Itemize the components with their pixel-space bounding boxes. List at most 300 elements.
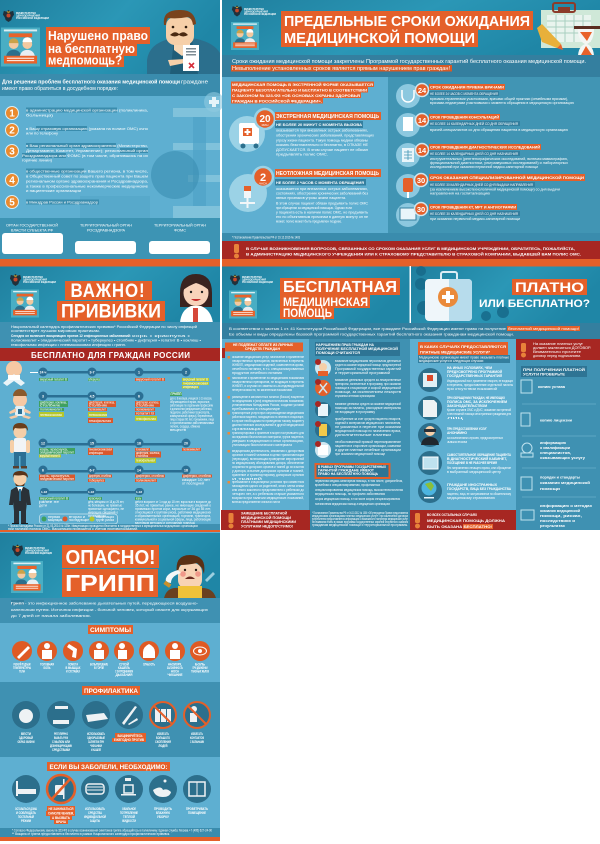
number 3 item: горячие линии) [22,158,53,162]
title: МЕДИЦИНСКАЯ [283,297,368,309]
column: не подлежат оплате: ЖНВЛП, медицинских изделий, компонентов крови, [232,363,304,367]
symptom: заложенность: ЗАЛОЖЕННОСТЬ [167,666,183,670]
timeline row 5: имеющие сведений о [88,510,118,514]
action: не заниматься самолечением: ВРАЧА [56,820,66,824]
column: не подлежат оплате: по медицинскому обследованию донора, обеспечение [232,461,304,465]
timer 20 [255,109,275,129]
prevention: салфетки [82,701,110,752]
column: не подлежат оплате: установленным Минздравом России, создание условий [232,403,304,407]
timeline row 1: 2 [185,370,187,374]
column: не подлежат оплате: (пересадки), включающая проведение мероприятий [232,457,304,461]
column: не подлежат оплате: сохранности донорских органов и тканей до их изъятия [232,465,304,469]
timeline row 3: эпидемический паротит [40,450,74,454]
column: не подлежат оплате: умерших в медицинских и иных организациях, [232,439,304,443]
section: профилактика [0,682,220,757]
title: БЕСПЛАТНАЯ [283,279,397,296]
symptom: боль в глазах [190,641,210,674]
panel: Бесплатная медицинская помощь [221,265,600,530]
intro band: Сегодня он включает вакцинацию против 12 инфекционных заболеваний: [11,333,131,338]
action: влажная уборка [149,775,177,819]
column: не подлежат оплате [222,339,309,510]
timeline row 2: столбняк [89,404,108,408]
contact boxes: ТЕРРИТОРИАЛЬНЫЙ ОРГАН [154,222,206,228]
flu note: лица старше 60 лет, призывники, лица [170,418,214,422]
timeline row 3: полиомиелит [183,448,200,452]
timer 2: ЧАСА [259,182,267,186]
text: неотложная: В этом случае пациент обязан предъявить полис ОМС [276,200,368,206]
column: не подлежат оплате: ЖНВЛП, в случаях их замены из-за индивидуальной [232,384,304,388]
checklist item: порядки: оказания медицинской [540,480,591,485]
legal note: * Постановление Правительства РФ от 04.10.2012 № 1006 «Об утверждении Правил предоставления [312,511,408,515]
case: globe [418,479,511,503]
symptom: боль в глазах: БОЛЬ [195,662,206,666]
symptom: кашель: СУХОЙ [119,662,129,666]
outlined note [315,464,390,478]
item: 14 days diagnostics: НЕ БОЛЕЕ 14 КАЛЕНДАРНЫХ ДНЕЙ СО ДНЯ НАЗНАЧЕНИЯ [430,152,518,156]
text: экстренная [276,128,374,156]
warning: замещение: УСЛУГАМИ НЕДОПУСТИМО! [241,524,293,528]
number 5 item: в Минздрав России и Росздравнадзор [26,200,99,204]
action: маска: ИНДИВИДУАЛЬНОЙ [84,815,106,819]
logo: РОССИЙСКОЙ ФЕДЕРАЦИИ [23,280,56,284]
character: man with document [147,10,220,74]
symptom: температура: РЕЗКИЙ ПОДЪЕМ [14,662,31,666]
logo: ЗДРАВООХРАНЕНИЯ [23,278,47,282]
checklist item: устав: копию устава [538,384,566,389]
case: hospital: ПРЕДУСМОТРЕНО ПРОГРАММОЙ [447,370,503,374]
intro band: граждане [181,80,208,86]
outlined note: В РАМКАХ ПРОГРАММЫ ГОСУДАРСТВЕННЫХ [318,465,387,469]
text: неотложная: явных признаков угрозы жизни пациента. [276,195,346,200]
number 3 item: в Ваш региональный орган здравоохранения (Министерство, [26,143,148,148]
intro band: до 7 дней от начала заболевания. [11,613,91,618]
timeline row 4: каждые 10 лет [182,478,211,482]
timeline row 2: пневмококковая [40,413,62,417]
item: 14 days diagnostics: исследований при оказании первичной медико-санитарной помощи [430,165,538,169]
prevention: мытье рук: РЕГУЛЯРНО [54,732,68,736]
column: не подлежат оплате: возраста при наличии медицинских показаний, [232,496,304,500]
timeline row 5: прививках [88,514,106,518]
timeline row 4: 18 [184,468,188,472]
logo: РОССИЙСКОЙ ФЕДЕРАЦИИ [242,280,273,284]
text: неотложная [276,186,369,224]
checklist heading [521,366,587,377]
item: 24 hours: врачами-терапевтами участковыми, врачами общей практики (семейными врачами), [430,97,568,101]
prevention: избегать контактов [184,702,210,744]
column: не подлежат оплате: по медицинским и (или) эпидемиологическим показаниям, [232,399,304,403]
number 1 item: 1 [9,108,15,120]
number 1 item: в администрацию медицинской организации (поликлиника, [26,108,148,112]
footnote: * Приказ Минздрава России от 21.03.2014 № 125н. Иммунизация проводится бесплатно в государственных и муниципальных медицинских организациях [8,524,198,528]
column: не подлежат оплате: назначение и применение по медицинским показаниям [232,376,305,380]
column: не подлежат оплате: организации [232,427,262,431]
prevention: мытье рук: СРЕДСТВАМИ [52,748,70,752]
logo [10,274,56,286]
intro band: капельным путем. Источник инфекции - больной человек, который опасен для окружающих [11,607,208,612]
column: в каких случаях: В КАКИХ СЛУЧАЯХ ПРЕДОСТАВЛЯЮТСЯ [420,344,506,349]
column: в каких случаях: ПЛАТНЫЕ МЕДИЦИНСКИЕ УСЛУГИ* [420,350,490,354]
icon: ambulance [229,116,265,152]
timer 2: 2 [260,172,266,184]
heading: экстренная: ЭКСТРЕННАЯ МЕДИЦИНСКАЯ ПОМОЩЬ [276,114,379,120]
item: 14 days diagnostics: функциональной диагностики, ультразвуковых исследований) и лабораторных [430,161,568,165]
action: влажная уборка: ПРОВОДИТЬ [154,807,172,811]
case: monitor: САМОСТОЯТЕЛЬНОЕ ОБРАЩЕНИЕ ПАЦИЕНТА [447,453,511,457]
timeline row 3 [38,438,201,463]
intro band: полиомиелит • эпидемический паротит • туберкулез • столбняк • дифтерия • гепатит В • коклюш • [11,338,202,342]
warning: замещение [221,510,310,530]
checklist item: квалификация: оказывающих услугу [540,455,586,460]
checklist item: квалификация [521,440,586,460]
prevention: питание: ЗДОРОВЫЙ [19,736,33,740]
intro band: В соответствии с частью 1 ст. 41 Конституции Российской Федерации, все граждане Российской Федерации имеют право на получение [229,326,507,331]
text: неотложная: оказывается при внезапных острых заболеваниях, [276,186,368,191]
action: постельный режим: РЕЖИМ [21,819,31,823]
logo: МИНИСТЕРСТВО [16,11,36,15]
timeline row 4: от последней [182,482,204,486]
outlined note: ПРАВО НА БЕСПЛАТНУЮ ПОМОЩЬ [318,472,379,476]
case: globe: ГОСУДАРСТВ, ЛИЦА БЕЗ ГРАЖДАНСТВА [447,487,511,491]
checklist item: квалификация: информацию [540,440,567,445]
number 5 item [6,196,99,208]
number 2 item: 2 [9,126,15,136]
warning note: На оказание платных услуг [533,342,584,346]
text: экстренная: оказывается при внезапных острых заболеваниях, [276,128,368,132]
number 4 item [6,168,149,193]
checklist heading: ПРИ ПОЛУЧЕНИИ ПЛАТНОЙ [523,367,585,372]
timeline row 2 [38,392,160,423]
case: anonymous: законом [447,440,468,444]
symptom: головная боль [37,641,57,670]
timeline row 5: привитые однократно, не [88,507,124,511]
contact boxes: РОСЗДРАВНАДЗОРА [87,228,125,232]
logo: МИНИСТЕРСТВО [242,275,262,279]
timeline row 5: и образовательных организаций, торговли, транспорта, [135,514,211,518]
list panel [0,92,224,218]
footnote [0,828,220,837]
title: платно или бесплатно [479,279,590,310]
contact boxes: ТЕРРИТОРИАЛЬНЫЙ ОРГАН [80,222,132,228]
emergency note: С ЗАКОНОМ № 323-ФЗ «ОБ ОСНОВАХ ОХРАНЫ ЗДОРОВЬЯ [232,93,360,98]
logo: ЗДРАВООХРАНЕНИЯ [242,278,266,282]
case: hospital: при отсутствии показаний [447,387,497,391]
intro band [0,598,220,623]
red heading: БЕСПЛАТНО ДЛЯ ГРАЖДАН РОССИИ [31,351,190,360]
prevention: избегать людей: СКОПЛЕНИЯ [155,740,171,744]
timeline row 4: дифтерия, столбняк [136,474,164,478]
title: ГРИПП [65,570,155,596]
case: anonymous: ПРИ ПРЕДОСТАВЛЕНИИ УСЛУГ [447,427,487,431]
intro band: - это инфекционное заболевание дыхательных путей, передающееся воздушно- [25,600,199,606]
title: платно или бесплатно: ПЛАТНО [515,279,584,295]
symptom: заложенность: ЧИХАНИЕ [168,673,183,677]
symptom: температура: ТЕЛА [19,670,25,674]
symptom: горло [89,641,109,670]
symptom: температура [12,641,32,674]
emergency note: ПАЦИЕНТУ БЕЗОТЛАГАТЕЛЬНО И БЕСПЛАТНО В СООТВЕТСТВИИ [232,87,367,92]
logo [12,544,52,556]
violation 5: и другие платные лечебные организации [335,448,401,452]
case: monitor: В ДИАГНОСТИЧЕСКИЙ КАБИНЕТ, [447,457,507,461]
violation 2 [315,378,401,398]
character: teenager [10,423,30,468]
footnote: ** Вакцина от гриппа предоставляется бесплатно в рамках Национального календаря профилактических прививок. [12,832,170,836]
intro band: бесплатной медицинской помощи! [508,326,579,331]
title: платно или бесплатно: ИЛИ БЕСПЛАТНО? [479,298,590,310]
icon: calendar and hourglass [537,3,600,57]
intro band: Грипп [11,600,25,606]
prevention: питание [12,701,40,744]
poster thumbnail [229,290,257,318]
contact boxes: ОРГАН ГОСУДАРСТВЕННОЙ [6,222,58,228]
prevention: салфетки: И КАШЛЕ [91,748,101,752]
warning: во всех остальных случаях: БЫТЬ ОКАЗАНА БЕСПЛАТНО! [427,524,492,529]
column: не подлежат оплате: оказание медицинских услуг, назначение и применение [232,355,304,359]
column: не подлежат оплате: СРЕДСТВ ГРАЖДАН [245,347,281,351]
red heading [0,348,220,361]
prevention: питание: ВЕСТИ [21,732,31,736]
case: documents: ПРИ ОБРАЩЕНИИ ГРАЖДАН, НЕ ИМЕЮЩИХ [447,396,506,400]
poster thumbnail [1,28,40,66]
timeline row 5: ранее не [39,500,59,504]
checklist item: лицензия [521,413,573,426]
symptom: заложенность: НОСА [171,670,179,674]
title [281,11,533,47]
action: маска: СРЕДСТВА [88,811,102,815]
warning: замещение: ПЛАТНЫМИ МЕДИЦИНСКИМИ [241,519,296,524]
warning band [222,241,600,259]
checklist item: лицензия: копию лицензии [540,418,573,422]
timeline row 2: гемофильная [89,419,111,423]
violation 2: отпускаемых аптечными организациями [335,394,375,398]
timeline row 5: прививках против кори, взрослые от 36 до 55 лет, [135,507,211,511]
case: hospital: в перечень, предоставление отдельной палаты [447,383,513,387]
symptom: кашель: С ЗАТРУДНЕНИЕМ [115,670,133,674]
column: нарушением прав [309,339,410,510]
timeline row 3: полиомиелит [136,448,149,452]
footnote [0,524,220,531]
column: не подлежат оплате: лекарственных препаратов, не входящих в перечень [232,380,304,384]
column: не подлежат оплате: хранение и транспортировку донорских органов [232,473,304,477]
timeline row 5: 1-18 [136,490,142,494]
action: маска: ЗАЩИТЫ [90,819,100,823]
item: 14 days [396,113,569,137]
column: не подлежат оплате: пребывания в стационаре [232,407,280,411]
violation 2: помощи, за исключением лекарств [335,390,401,394]
warning: во всех остальных случаях [410,510,516,530]
timeline row 3: инфекция [89,451,103,455]
timer 20: МИН [262,123,268,127]
timeline row 1: 1 [138,370,140,374]
heading: экстренная: НЕ БОЛЕЕ 20 МИНУТ С МОМЕНТА ВЫЗОВА [276,122,362,127]
emergency note [231,82,374,104]
number 3 item: Департамент, Комитет, Управление); региональный орган [26,148,148,153]
emergency note: МЕДИЦИНСКАЯ ПОМОЩЬ В ЭКСТРЕННОЙ ФОРМЕ ОКАЗЫВАЕТСЯ [232,82,373,87]
violation 1: и территориальной программой [335,371,390,375]
action: проветривание [183,775,211,815]
violation 2: препараты, включенные в программу, при оказании [335,382,401,386]
note text: медицинская помощь, по профилю заболевания [315,492,385,496]
checklist item: методы: помощи, рисках, [540,513,582,518]
flu note: коммунальной сферы), беременные, [170,414,213,418]
title: ПРИВИВКИ [61,302,161,322]
timeline row 4: дифтерия, столбняк [183,474,211,478]
violation 4: не указанных в перечне при оказании [335,425,401,429]
symptom: кашель: КАШЕЛЬ [118,666,130,670]
timeline row 1: вирусный гепатит В [183,378,209,382]
timeline row 2: 6 [138,394,140,398]
column: нарушением прав: ПОМОЩИ СЧИТАЮТСЯ [316,351,361,355]
intro band [222,323,600,339]
item: 30 days CT: СРОК ПРОВЕДЕНИЯ КТ, МРТ И АНГИОГРАФИИ [430,205,516,210]
symptom: заложенность [165,641,185,677]
legal note [310,510,410,530]
number 1 item: больница) [26,112,54,118]
prevention: вакцинация: ЕЖЕГОДНО ПРОТИВ [114,738,144,742]
number 2 item [6,124,149,136]
case: documents [418,396,511,420]
symptom: боль в мышцах: В МЫШЦАХ [66,666,81,670]
item: 14 days diagnostics: 14 [418,146,427,155]
title: ОПАСНО! [66,547,156,569]
timeline row 2: гемофильная [136,417,156,421]
column: не подлежат оплате: органов и тканей человека в целях трансплантации [232,453,304,457]
prevention: избегать контактов: ИЗБЕГАТЬ [191,732,203,736]
outlined note: ГАРАНТИЙ ГРАЖДАНЕ ИМЕЮТ [318,468,375,472]
violation 5: пациентов в сторонние организации, компании [335,444,401,448]
checklist item: методы: информацию о методах [540,503,593,508]
column: не подлежат оплате: диагностических исследований в другой медицинской [232,423,304,427]
intro band [222,55,600,77]
case: monitor: в выбранный медицинский центр [447,470,501,474]
timeline row 3: 20 [184,442,188,446]
action: проветривание: ПОМЕЩЕНИЕ [188,811,207,815]
number 4 item: и пациентские организации [26,188,81,193]
text: экстренная: предъявлять полис ОМС. [276,152,328,156]
text: неотложная: при обращении за медицинской помощью. Однако если [276,205,352,210]
item: 24 hours: врачами-педиатрами участковыми с момента обращения в медицинскую организацию [430,101,574,105]
logo: ЗДРАВООХРАНЕНИЯ [25,549,49,553]
checklist item: методы: оказания медицинской [540,508,580,513]
prevention: мытье рук [47,701,75,752]
timer 20: 20 [259,114,271,125]
item: 30 days CT: при оказании первичной медико-санитарной помощи [430,217,520,221]
number 1 item [6,106,148,120]
item: 30 days specialized [396,174,585,198]
title: ВАЖНО! [70,281,146,302]
timeline row 4: корь, краснуха, [40,474,70,478]
logo: МИНИСТЕРСТВО [23,275,43,279]
item: 30 days specialized: направления на госпитализацию [430,192,491,196]
violation 3: взимание денежных средств за оказание медицинской [335,402,401,406]
case: anonymous [418,423,503,447]
item: 30 days CT: 30 [417,205,425,214]
text: экстренная: обострении хронических заболеваний, представляющих [276,132,374,138]
legal note: медицинскими организациями платных медицинских услуг»: при заключении договора [312,514,408,518]
violation 4: приобретение за счет средств пациента лекарств, [335,417,401,421]
symptom: кашель: ДЫХАНИЯ [116,673,133,677]
warning: замещение: МЕДИЦИНСКОЙ ПОМОЩИ [241,515,291,520]
title [62,545,159,597]
column: не подлежат оплате: или иного законного представителя с ребенком до [232,488,304,492]
warning band: В СЛУЧАЕ ВОЗНИКНОВЕНИЯ ВОПРОСОВ, СВЯЗАННЫХ СО СРОКОМ ОКАЗАНИЯ УСЛУГ В МЕДИЦИНСКОМ УЧРЕЖДЕНИИ, ОБРАТИТЕСЬ, ПОЖАЛУЙСТА, [246,246,575,251]
action: маска: ИСПОЛЬЗОВАТЬ [85,807,105,811]
action: не заниматься самолечением: А ВЫЗВАТЬ [52,816,70,820]
flu note: с хроническими заболеваниями [170,421,214,425]
note text: специализированная медицинская помощь, высокотехнологичная [315,488,403,492]
intro band: соответствует лучшим мировым практикам. [11,328,100,333]
action: не заниматься самолечением [46,775,75,824]
timeline row 5: краснуха [89,496,101,500]
column: в каких случаях: медицинские услуги в следующих случаях: [419,359,484,363]
case: monitor: ПОСЕЩЕНИЕ В НЕ РАБОЧЕЕ ВРЕМЯ [447,461,497,465]
symptom: боль в мышцах [63,641,83,674]
text: экстренная: ДОПУСКАЕТСЯ. В этом случае пациент не обязан [276,147,368,152]
prevention: салфетки: ЧИХАНИИ [90,744,102,748]
checklist item: устав [521,380,566,393]
timeline row 4: 6 [42,468,44,472]
title: ПРЕДЕЛЬНЫЕ СРОКИ ОЖИДАНИЯ [284,13,530,30]
timeline row 5: вирусный гепатит В [40,496,69,500]
timeline row 4: полиомиелит [136,478,156,482]
timeline row 1 [30,368,209,389]
symptom: боль в глазах: ГЛАЗНЫХ ЯБЛОК [191,670,210,674]
warning: замещение: ЗАМЕЩЕНИЕ БЕСПЛАТНОЙ [241,510,287,516]
section: профилактика: ПРОФИЛАКТИКА [84,689,139,695]
prevention: салфетки: ОДНОРАЗОВЫЕ [87,736,105,740]
intro band: Невыполнение установленных сроков является прямым нарушением прав граждан! [232,66,450,72]
item: 30 days specialized: НЕ БОЛЕЕ 30 КАЛЕНДАРНЫХ ДНЕЙ СО ДНЯ ВЫДАЧИ НАПРАВЛЕНИЯ [430,183,533,187]
number 5 item: 5 [9,198,15,208]
poster thumbnail [11,290,39,318]
intro band [0,74,220,96]
legend: групп риска [96,518,114,522]
action: постельный режим: И СОБЛЮДАТЬ [16,811,36,815]
timeline row 5: дети [39,504,47,508]
violation 1: взимание медицинским персоналом денежных [335,359,401,363]
warning band: В АДМИНИСТРАЦИЮ МЕДИЦИНСКОГО УЧРЕЖДЕНИЯ ИЛИ К СТРАХОВОМУ ПРЕДСТАВИТЕЛЮ В СТРАХОВОЙ КОМПАНИИ, ВЫДАВШЕЙ ВАМ ПОЛИС ОМС. [246,252,581,256]
symptom: заложенность: НАСМОРК, [168,662,182,666]
violation 1: Программой государственных гарантий [335,367,401,371]
panel: Опасно! Грипп [0,530,220,844]
item: 14 days diagnostics: инструментальных (рентгенографических исследований, включая маммографию, [430,157,568,161]
case: monitor [418,451,511,475]
item: 24 hours: СРОК ОЖИДАНИЯ ПРИЕМА ВРАЧАМИ [430,85,504,90]
column: не подлежат оплате: и тканей [232,477,262,481]
icon: infant swaddled [3,361,25,386]
case: hospital [418,366,513,392]
intro band: Национальный календарь профилактических прививок* Российской Федерации по числу инфекций [11,324,197,329]
action: не заниматься самолечением: НЕ ЗАНИМАТЬСЯ [48,807,74,811]
item: 30 days specialized: 30 [417,176,425,185]
footnote: * Согласно Федеральному закону № 323-ФЗ в случае возникновения симптомов гриппа обращайтесь в поликлинику. Единая служба: Москва +7 (495) 627-24-00 [12,828,212,832]
symptom: головная боль: БОЛЬ [44,666,51,670]
action: питье: ОБИЛЬНОЕ [122,807,137,811]
logo [3,10,49,22]
title: Нарушено право [48,28,148,43]
logo: МИНИСТЕРСТВО [25,546,45,550]
number 4 item: а также в профессиональные некоммерческие медицинские [26,184,149,188]
checklist heading: УСЛУГИ ПРОВЕРЬТЕ [523,372,565,376]
case: hospital: ГОСУДАРСТВЕННЫХ ГАРАНТИЙ [447,374,503,378]
number 2 item: или по телефону [26,130,58,136]
violation 5: необоснованный прямой перенаправление [335,440,401,444]
action: питье: ЖИДКОСТИ [121,819,136,823]
case: monitor: без направления лечащего врача, или обращение [447,466,511,470]
intro band: Сроки ожидания медицинской помощи закреплены Программой государственных гарантий бесплатного оказания медицинской помощи. [232,58,586,65]
column: не подлежат оплате: непереносимости, по жизненным показаниям [232,388,293,392]
prevention: избегать контактов: КОНТАКТОВ [190,736,204,740]
